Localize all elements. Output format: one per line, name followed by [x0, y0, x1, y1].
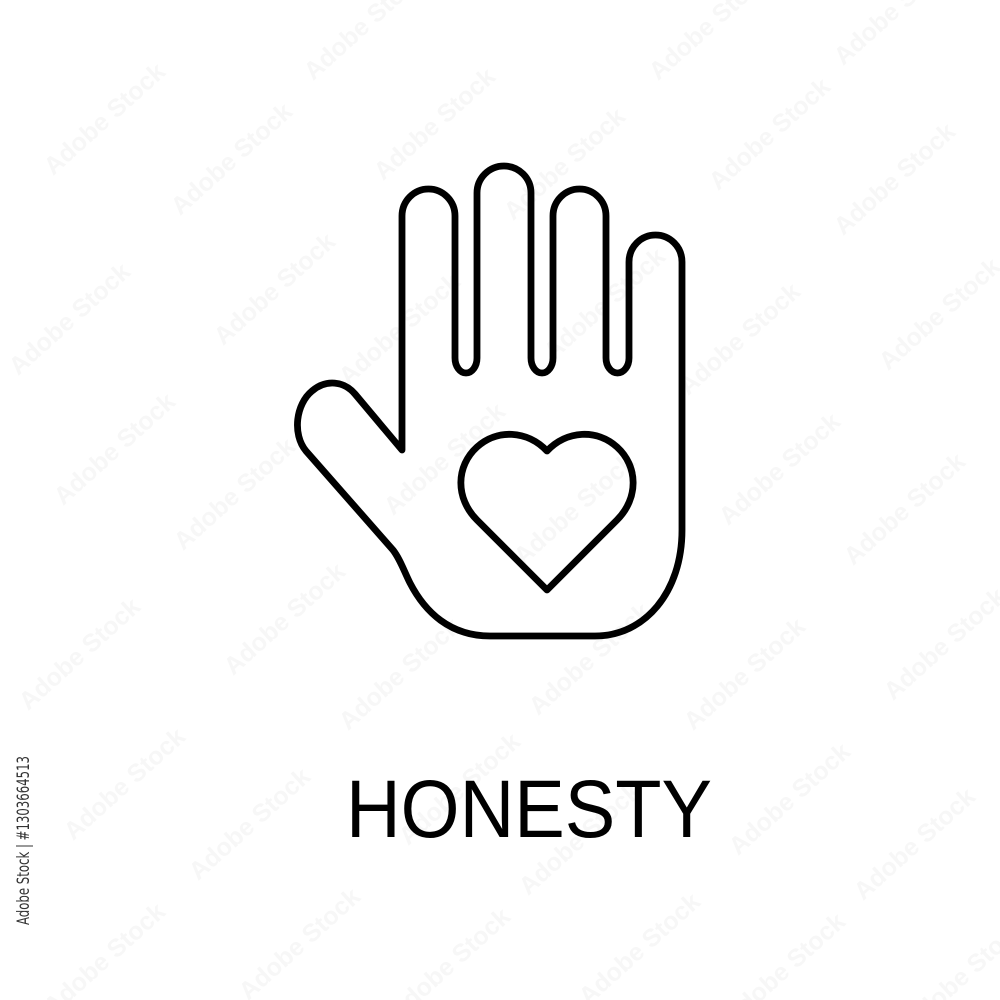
- watermark pattern: Adobe Stock: [184, 762, 316, 886]
- watermark pattern: Adobe Stock: [499, 102, 631, 226]
- watermark pattern: Adobe Stock: [714, 407, 846, 531]
- heart: [461, 434, 633, 590]
- watermark pattern: Adobe Stock: [219, 557, 351, 681]
- watermark pattern: Adobe Stock: [49, 387, 181, 511]
- title: HONESTY: HONESTY: [346, 764, 712, 855]
- watermark pattern: Adobe Stock: [849, 782, 981, 906]
- watermark pattern: Adobe Stock: [334, 267, 466, 391]
- watermark pattern: Adobe Stock: [4, 257, 136, 381]
- watermark pattern: Adobe Stock: [704, 72, 836, 196]
- watermark pattern: Adobe Stock: [539, 242, 671, 366]
- watermark pattern: Adobe Stock: [169, 432, 301, 556]
- watermark pattern: Adobe Stock: [369, 62, 501, 186]
- watermark pattern: Adobe Stock: [166, 97, 298, 221]
- watermark pattern: Adobe Stock: [829, 117, 961, 241]
- watermark pattern: Adobe Stock: [14, 592, 146, 716]
- icon: raised hand with heart: [297, 166, 682, 636]
- watermark pattern: Adobe Stock: [514, 777, 646, 901]
- watermark pattern: Adobe Stock: [59, 722, 191, 846]
- watermark pattern: Adobe Stock: [334, 612, 466, 736]
- watermark pattern: Adobe Stock: [674, 277, 806, 401]
- watermark pattern: Adobe Stock: [379, 397, 511, 521]
- watermark id: vertical credit: Adobe Stock | #1303664513: [14, 756, 33, 925]
- hand outline: [297, 166, 682, 636]
- watermark pattern: Adobe Stock: [724, 737, 856, 861]
- watermark pattern: Adobe Stock: [524, 597, 656, 721]
- watermark pattern: Adobe Stock: [509, 447, 641, 571]
- watermark pattern: Adobe Stock: [39, 57, 171, 181]
- watermark pattern: Adobe Stock: [394, 727, 526, 851]
- watermark pattern: Adobe Stock: [839, 447, 971, 571]
- watermark pattern: Adobe Stock: [209, 227, 341, 351]
- watermark pattern: Adobe Stock: [679, 612, 811, 736]
